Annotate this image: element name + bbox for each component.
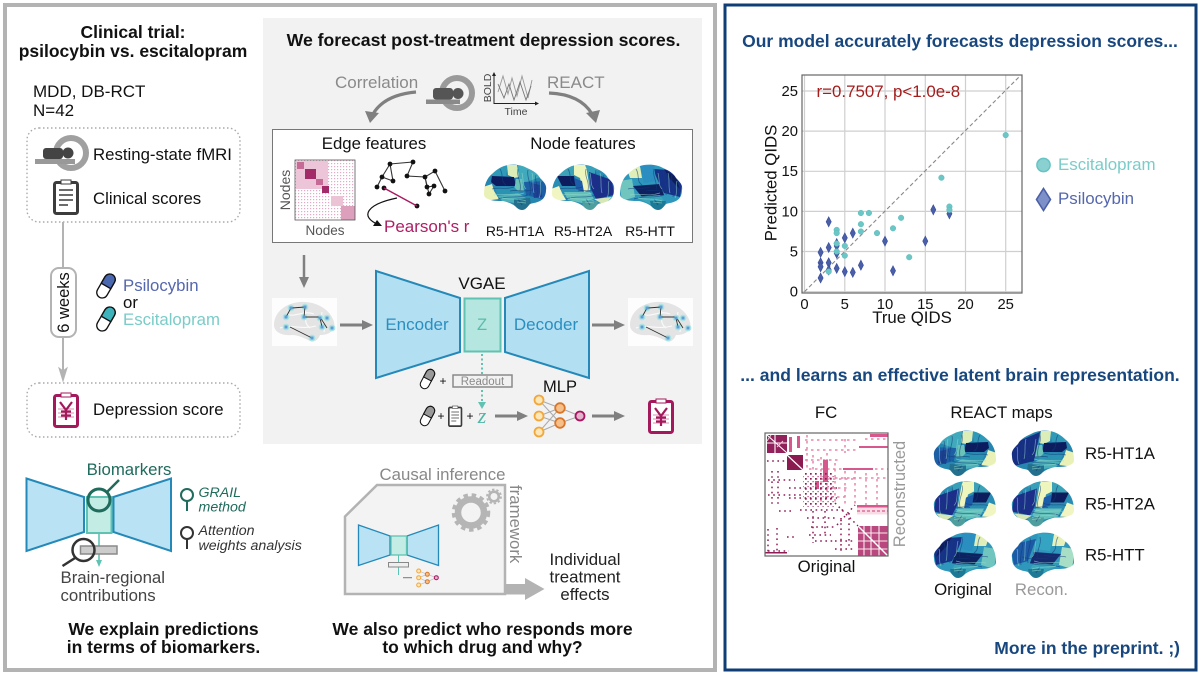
text: explain conclusion xyxy=(67,619,260,657)
text: biomarkers: Biomarkers xyxy=(87,460,171,479)
axis ticks: 5 xyxy=(790,244,798,260)
icon: attention lens xyxy=(181,527,193,549)
arrow: six week timeline: 6 weeks xyxy=(55,272,73,333)
text: MLP: MLP xyxy=(543,378,577,396)
text: individual treatment effects: Individual xyxy=(550,550,620,569)
arrow: six week timeline xyxy=(51,222,76,381)
grid xyxy=(802,75,1022,293)
text: drug arms: Psilocybin xyxy=(123,276,199,295)
text: cohort: MDD, DB-RCT xyxy=(33,82,145,101)
text: resting-state fMRI: Resting-state fMRI xyxy=(93,145,232,164)
axis ticks xyxy=(782,84,1014,313)
axis titles: Predicted QIDS xyxy=(762,125,780,241)
icon: output brain network xyxy=(628,298,693,346)
text: causal inference: Causal inference xyxy=(380,465,505,484)
icon: brain HT1A xyxy=(483,164,550,211)
arrow: input to encoder xyxy=(340,320,373,330)
chart: connectivity matrix xyxy=(295,160,355,220)
text: explain conclusion: in terms of biomarkers. xyxy=(67,637,260,657)
icon: predicted score clipboard xyxy=(650,399,672,432)
chart: brain graph xyxy=(368,160,447,226)
text: original label: Original xyxy=(934,580,992,599)
text: individual treatment effects: effects xyxy=(560,585,610,604)
text: plus signs xyxy=(437,409,474,423)
text: plus: + xyxy=(439,374,447,388)
box: readout xyxy=(453,375,512,388)
heading: node features: Node features xyxy=(530,134,636,153)
shape: latent Z xyxy=(464,298,500,352)
heading: clinical trial xyxy=(19,22,247,61)
icon: brain HTT xyxy=(619,164,686,211)
text: reconstructed: Reconstructed xyxy=(891,441,909,547)
shape: encoder: Encoder xyxy=(385,315,449,334)
axis ticks: 5 xyxy=(841,297,849,313)
text: clinical scores: Clinical scores xyxy=(93,189,201,208)
text: predict conclusion: to which drug and why? xyxy=(382,637,583,657)
series: psilocybin xyxy=(818,205,952,283)
text: GRAIL method: GRAIL xyxy=(198,485,241,501)
icon: clinical clipboard xyxy=(54,180,78,214)
panel: forecasting pipeline xyxy=(263,18,702,444)
shape: decoder: Decoder xyxy=(514,315,578,334)
heading: model forecasts: Our model accurately forecasts depression scores... xyxy=(742,31,1178,51)
text: receptor labels: R5-HT1A xyxy=(486,223,545,239)
diagram: mini VGAE xyxy=(358,525,438,587)
text: brain-regional contributions xyxy=(60,568,165,605)
arrow: features to graph xyxy=(299,255,309,288)
text: GRAIL method xyxy=(198,485,247,516)
diagram: MLP network xyxy=(534,396,584,436)
axis ticks: 20 xyxy=(782,124,798,140)
text: original FC label: Original xyxy=(798,557,855,576)
text: FC: FC xyxy=(815,403,837,422)
text: predict conclusion: We also predict who responds more xyxy=(332,619,633,639)
text: preprint note: More in the preprint. ;) xyxy=(994,638,1180,658)
text: receptor labels xyxy=(486,223,675,239)
text: latent z: z xyxy=(477,403,487,428)
axis ticks: 10 xyxy=(782,204,798,220)
text: cohort xyxy=(33,82,145,120)
icon: capsule input xyxy=(419,405,436,427)
text: depression score: Depression score xyxy=(93,400,224,419)
diagram: biomarker explanation xyxy=(26,478,171,567)
icon: capsule readout xyxy=(419,368,436,390)
panel: outcome xyxy=(27,383,240,437)
chart: BOLD time series: Time xyxy=(505,106,528,118)
text: predict conclusion xyxy=(332,619,633,657)
arrow: decoder to output xyxy=(592,320,625,330)
shape: decoder xyxy=(505,271,589,378)
axis ticks: 0 xyxy=(800,297,809,313)
text: brain-regional contributions: Brain-regional xyxy=(60,568,165,587)
arrow: to edge features xyxy=(365,92,416,123)
panel: right results xyxy=(725,5,1196,670)
axis ticks: 25 xyxy=(997,297,1014,313)
text: matrix y label: Nodes xyxy=(277,170,293,210)
text: matrix x label: Nodes xyxy=(305,223,345,238)
icon: depression clipboard xyxy=(54,393,78,426)
heading: clinical trial: psilocybin vs. escitalopram xyxy=(19,41,247,61)
arrow: to node features xyxy=(549,93,600,123)
text: brain-regional contributions: contributions xyxy=(60,586,156,605)
heading: forecast: We forecast post-treatment depression scores. xyxy=(287,30,680,50)
text: REACT maps: REACT maps xyxy=(950,403,1053,422)
text: receptor labels: R5-HT2A xyxy=(554,223,613,239)
icon: input brain network xyxy=(272,298,337,346)
text: Pearson's r: Pearson's r xyxy=(384,217,470,236)
icon: GRAIL lens xyxy=(181,489,193,511)
axis ticks: 0 xyxy=(790,284,798,300)
arrow: z to MLP xyxy=(495,411,528,421)
text: attention weights: Attention xyxy=(198,523,255,539)
legend: Psilocybin xyxy=(1058,189,1134,208)
chart: BOLD time series: BOLD xyxy=(482,73,494,102)
chart: BOLD time series xyxy=(482,72,539,118)
heading: clinical trial: Clinical trial: xyxy=(80,22,186,42)
text: attention weights: weights analysis xyxy=(198,538,302,554)
legend xyxy=(1036,155,1156,210)
arrow: to treatment effects xyxy=(505,578,544,600)
text: VGAE: VGAE xyxy=(458,274,506,293)
axis ticks: 15 xyxy=(782,164,798,180)
box: readout: Readout xyxy=(461,376,505,388)
diagram: VGAE xyxy=(376,271,589,378)
text: receptor labels: R5-HTT xyxy=(625,223,675,239)
text: correlation stat: r=0.7507, p<1.0e-8 xyxy=(816,82,960,101)
text: individual treatment effects xyxy=(550,550,621,604)
heading: latent representation: ... and learns an effective latent brain representation. xyxy=(740,365,1180,385)
icon: clipboard input xyxy=(449,406,461,426)
arrow: MLP to score xyxy=(592,411,625,421)
axis ticks: 20 xyxy=(957,297,974,313)
icon: gears xyxy=(454,490,501,530)
group: REACT brain maps xyxy=(930,430,1075,579)
shape: latent Z: Z xyxy=(477,316,487,334)
axis ticks: 15 xyxy=(917,297,934,313)
text: explain conclusion: We explain predictions xyxy=(68,619,259,639)
text: individual treatment effects: treatment xyxy=(550,568,621,586)
text: cohort: N=42 xyxy=(33,101,74,120)
text: correlation: Correlation xyxy=(335,73,418,92)
axis titles: True QIDS xyxy=(872,308,952,327)
icon: MRI scanner xyxy=(35,138,86,168)
axis ticks: 25 xyxy=(782,84,798,100)
series: escitalopram xyxy=(826,132,1008,274)
panel: left study overview xyxy=(5,5,715,670)
text: receptor labels right: R5-HT1A xyxy=(1085,444,1156,463)
icon: escitalopram capsule xyxy=(95,305,117,333)
chart: scatter plot xyxy=(762,75,1022,327)
panel: graph features xyxy=(272,130,692,242)
arrow: latent readout xyxy=(478,354,486,409)
legend: Escitalopram xyxy=(1058,155,1156,174)
icon: MRI scanner gray xyxy=(426,78,472,108)
axis titles xyxy=(762,125,952,327)
icon: psilocybin capsule xyxy=(95,272,117,300)
text: drug arms xyxy=(123,276,220,329)
icon: brain HT2A xyxy=(551,164,618,211)
text: REACT: REACT xyxy=(547,73,605,92)
axis ticks: 10 xyxy=(877,297,893,313)
text: receptor labels right: R5-HT2A xyxy=(1085,494,1156,514)
text: plus signs: + xyxy=(466,409,474,423)
heading: edge features: Edge features xyxy=(322,134,426,153)
text: drug arms: Escitalopram xyxy=(123,310,220,329)
text: receptor labels right: R5-HTT xyxy=(1085,546,1145,564)
shape: encoder xyxy=(376,271,460,378)
text: framework: framework xyxy=(506,485,525,564)
diagram: causal inference framework xyxy=(345,485,505,594)
chart: FC matrix xyxy=(765,433,888,556)
text: receptor labels right xyxy=(1085,444,1156,564)
panel: baseline data xyxy=(27,128,240,222)
text: attention weights xyxy=(198,523,302,554)
text: GRAIL method: method xyxy=(198,500,247,516)
text: drug arms: or xyxy=(123,293,138,312)
text: recon label: Recon. xyxy=(1015,580,1068,599)
text: plus signs: + xyxy=(437,409,445,423)
